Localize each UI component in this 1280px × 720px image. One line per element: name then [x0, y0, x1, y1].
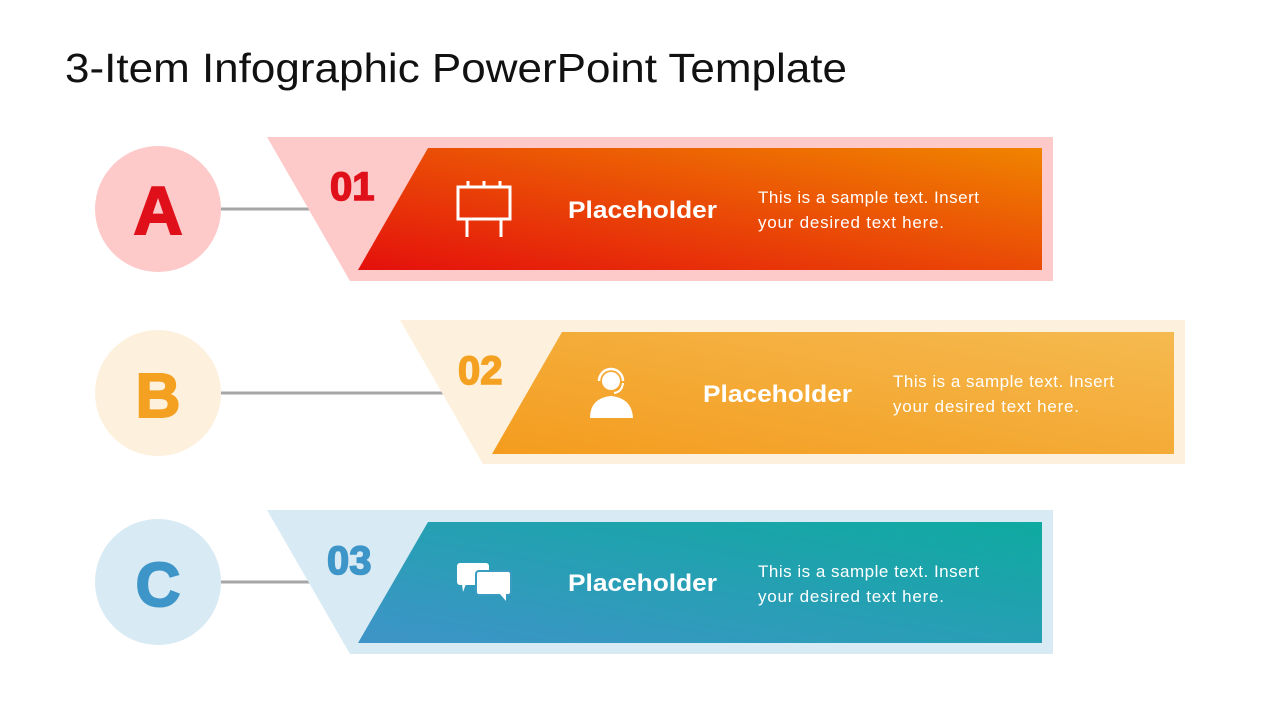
- heading 2: Placeholder: [703, 381, 852, 408]
- circle A: A: [133, 173, 183, 249]
- circle B: B: [136, 362, 180, 431]
- banner 3: [267, 510, 1053, 654]
- text 3: This is a sample text. Insert: [758, 562, 979, 581]
- text 3: your desired text here.: [758, 587, 944, 606]
- banner 2: [400, 320, 1185, 464]
- row 1: [95, 137, 1053, 281]
- title: 3-Item Infographic PowerPoint Template: [65, 45, 847, 91]
- number 02: 02: [458, 349, 502, 393]
- icon: chat bubbles: [457, 563, 511, 601]
- text 1: your desired text here.: [758, 213, 944, 232]
- heading 3: Placeholder: [568, 570, 717, 597]
- row 2: [95, 320, 1185, 464]
- text 2: your desired text here.: [893, 397, 1079, 416]
- heading 1: Placeholder: [568, 197, 717, 224]
- text 2: This is a sample text. Insert: [893, 372, 1114, 391]
- text 1: This is a sample text. Insert: [758, 188, 979, 207]
- circle C: C: [136, 551, 180, 620]
- row 3: [95, 510, 1053, 654]
- number 03: 03: [327, 539, 372, 583]
- circle C: [95, 519, 221, 645]
- icon: support agent: [590, 369, 633, 418]
- number 01: 01: [330, 165, 374, 209]
- icon: billboard: [458, 181, 510, 237]
- banner 1: [267, 137, 1053, 281]
- circle A: [95, 146, 221, 272]
- circle B: [95, 330, 221, 456]
